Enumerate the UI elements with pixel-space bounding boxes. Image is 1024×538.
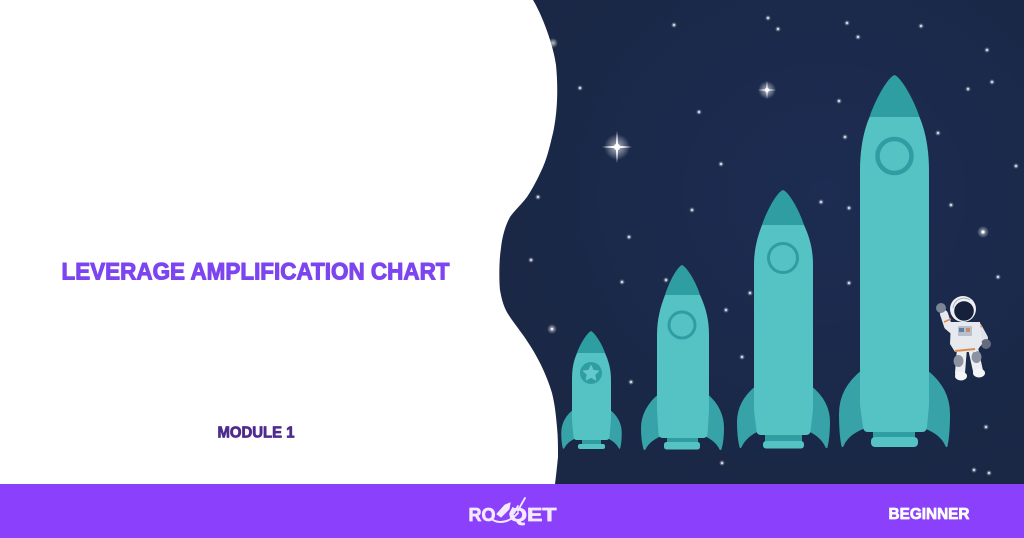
rocket 3 bbox=[738, 190, 829, 448]
big sparkle star bbox=[602, 131, 632, 163]
stars bbox=[528, 15, 1019, 476]
level label: BEGINNER bbox=[888, 506, 970, 523]
logo: RO bbox=[468, 504, 496, 525]
footer bar bbox=[0, 484, 1024, 538]
logo: QET bbox=[509, 504, 557, 525]
icon: logo rocket swoosh bbox=[493, 498, 525, 522]
rocket 4 (largest) bbox=[840, 75, 949, 447]
rocket 1 (smallest, star) bbox=[562, 331, 621, 449]
astronaut bbox=[936, 296, 991, 380]
logo bbox=[468, 498, 557, 525]
title: LEVERAGE AMPLIFICATION CHART bbox=[62, 258, 450, 286]
medium sparkle star bbox=[758, 81, 776, 99]
module label: MODULE 1 bbox=[218, 424, 295, 442]
rocket 2 bbox=[642, 265, 723, 450]
panel: night sky with wavy edge bbox=[499, 0, 1024, 484]
